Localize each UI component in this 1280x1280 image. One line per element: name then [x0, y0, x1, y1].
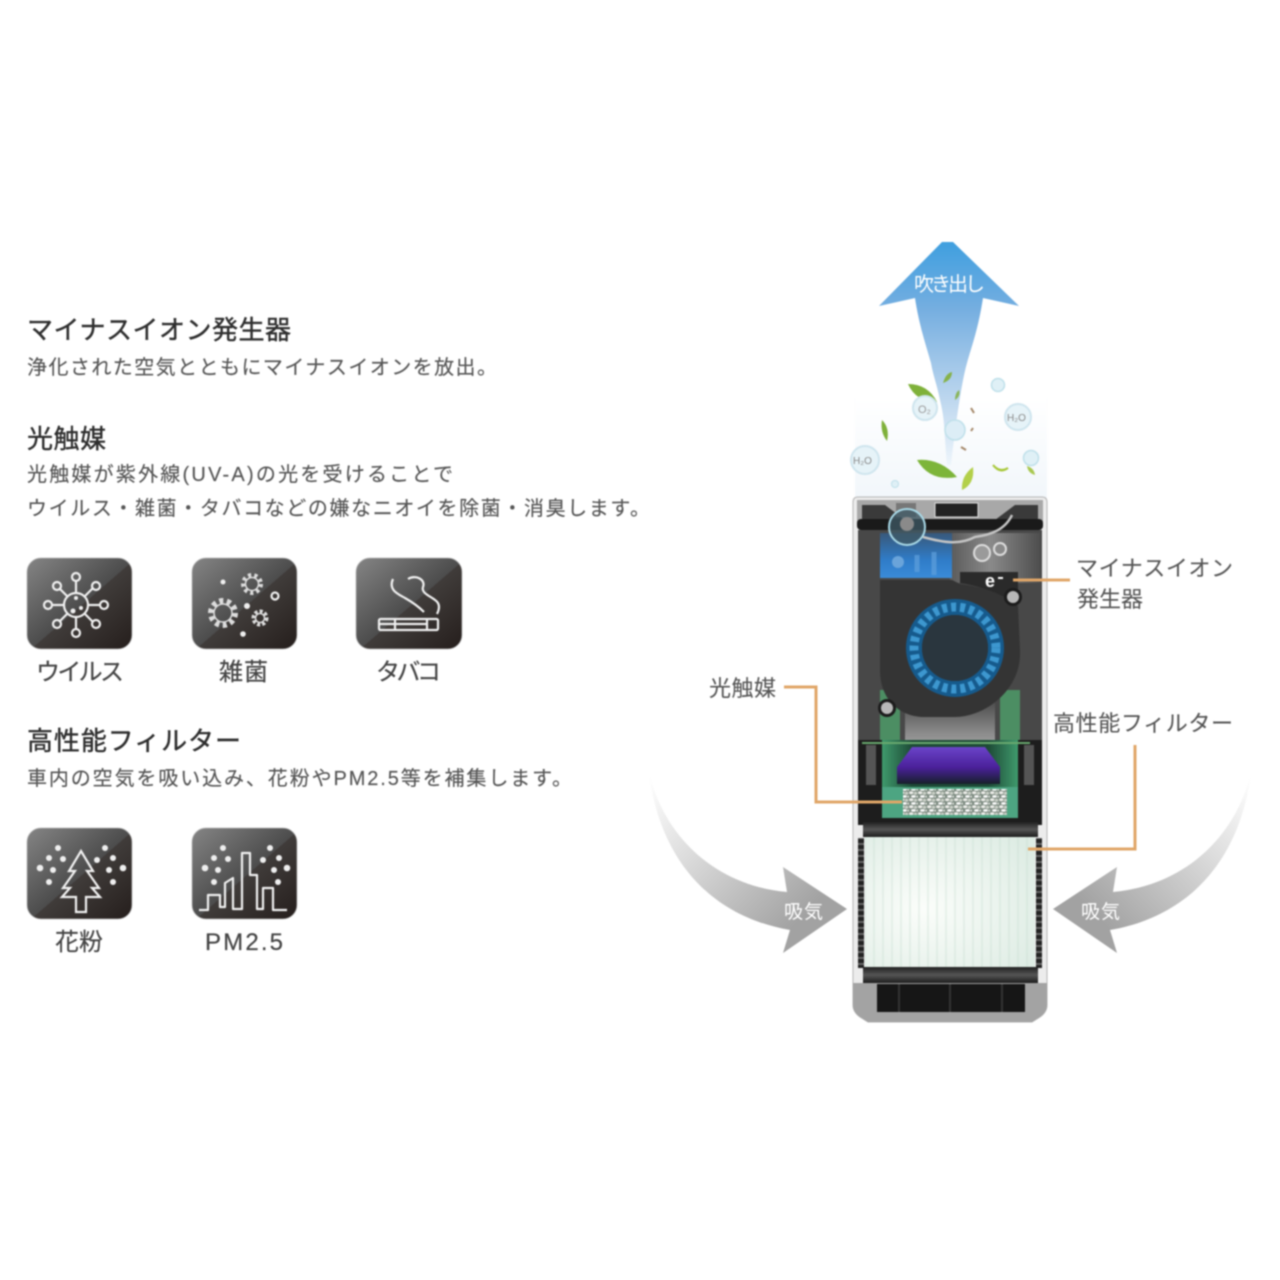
rear grey panel [950, 533, 1040, 583]
side columns [880, 690, 1020, 745]
arrow: right intake [1053, 767, 1252, 953]
leaves and air molecules: O₂ [918, 404, 931, 416]
callout: negative ion generator: 発生器 [1077, 587, 1143, 612]
label: germs: 雑菌 [219, 659, 268, 686]
outflow haze above the device [855, 395, 1047, 498]
blue light box [880, 533, 952, 578]
icon: virus [27, 558, 132, 649]
callout: photocatalyst: 光触媒 [709, 676, 776, 701]
bottom base [853, 983, 1047, 1022]
screws [878, 588, 1022, 717]
ion bubble and wire [889, 509, 1012, 561]
fan ring [914, 607, 996, 689]
leaves and air molecules: H₂O [853, 456, 872, 467]
under fan panel [905, 700, 995, 747]
label: tobacco: タバコ [376, 659, 441, 686]
label: right intake: 吸気 [1081, 901, 1120, 923]
device: air purifier cutaway [853, 497, 1047, 1022]
callout: high performance filter [1028, 711, 1233, 849]
label: left intake: 吸気 [784, 901, 823, 923]
callout: negative ion generator [1013, 556, 1233, 612]
device shell [853, 497, 1047, 1022]
arrow: air outflow [879, 242, 1019, 465]
text: photocatalyst description: ウイルス・雑菌・タバコなどの嫌なニオイを除菌・消臭します。 [27, 497, 650, 520]
ion emitter plate: e [985, 571, 995, 591]
text: photocatalyst description [27, 463, 650, 520]
HEPA filter [863, 822, 1038, 983]
icon: PM2.5 [192, 828, 297, 919]
photocatalyst unit [858, 740, 1042, 825]
top vent section [857, 500, 1043, 530]
ion emitter plate [960, 571, 1018, 598]
leaves and air molecules: H₂O [1007, 413, 1026, 424]
heading: negative ion generator: マイナスイオン発生器 [27, 315, 291, 345]
callout: photocatalyst [709, 676, 902, 802]
label: virus: ウイルス [36, 659, 124, 686]
text: negative ion description: 浄化された空気とともにマイナスイオンを放出。 [27, 356, 497, 379]
interior background [858, 530, 1042, 825]
text: photocatalyst description: 光触媒が紫外線(UV-A)の光を受けることで [27, 463, 453, 486]
arrow: left intake [648, 767, 847, 953]
label: PM2.5: PM2.5 [205, 929, 283, 956]
callout: high performance filter: 高性能フィルター [1053, 711, 1233, 736]
icon: germs [192, 558, 297, 649]
heading: high performance filter: 高性能フィルター [27, 726, 241, 756]
fan housing [880, 580, 1020, 717]
callout: negative ion generator: マイナスイオン [1076, 556, 1233, 581]
text: filter description: 車内の空気を吸い込み、花粉やPM2.5等を補集します。 [27, 767, 572, 790]
label: outflow: 吹き出し [914, 273, 985, 296]
heading: photocatalyst: 光触媒 [27, 424, 106, 454]
label: pollen: 花粉 [55, 929, 103, 956]
filter side ribs [858, 838, 1042, 968]
leaves and air molecules [851, 372, 1038, 490]
icon: cigarette [356, 558, 462, 649]
icon: pollen [27, 828, 132, 919]
